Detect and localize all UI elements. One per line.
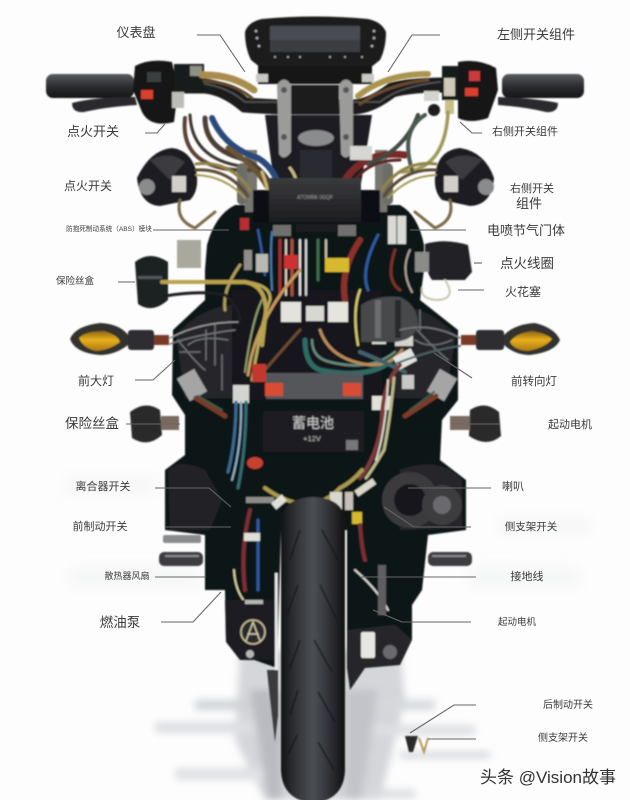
label: right switch assembly lower: 右侧开关 — [510, 181, 554, 195]
label: front brake switch: 前制动开关 — [72, 519, 128, 533]
left fuse pod — [135, 256, 266, 345]
label: starter motor lower: 起动电机 — [498, 616, 536, 628]
label haze — [65, 480, 590, 584]
label: dashboard: 仪表盘 — [116, 25, 156, 40]
label: headlight — [78, 360, 175, 388]
label: radiator fan: 散热器风扇 — [104, 570, 150, 581]
frame mass — [165, 205, 466, 668]
right turn signal — [395, 323, 560, 364]
right side pod — [450, 405, 501, 442]
label: fuse box lower — [65, 415, 180, 431]
lower fork — [225, 573, 412, 742]
label: headlight: 前大灯 — [78, 373, 114, 388]
ground shadow — [155, 650, 490, 800]
label: side stand switch lower: 侧支架开关 — [538, 731, 588, 744]
label: left switch assembly — [388, 27, 575, 72]
label: front turn signal — [434, 353, 557, 388]
label: side stand switch upper: 侧支架开关 — [505, 520, 558, 533]
lower wiring — [234, 510, 388, 615]
watermark: 头条 @Vision故事 — [480, 768, 616, 787]
label: ignition switch lower: 点火开关 — [64, 179, 112, 193]
label: ABS module: 防抱死制动系统（ABS）模块 — [66, 224, 152, 233]
label: horn — [408, 479, 524, 493]
label: fuse box upper: 保险丝盒 — [56, 275, 94, 287]
battery — [263, 373, 364, 452]
label: clutch switch — [76, 479, 231, 507]
battery: 蓄电池 — [292, 415, 334, 431]
label: ignition switch upper — [67, 124, 165, 139]
left switch housing — [133, 61, 204, 124]
label: left switch assembly: 左侧开关组件 — [497, 27, 575, 42]
right grip — [502, 74, 584, 98]
handlebar clamps — [277, 80, 353, 158]
central wiring — [177, 216, 452, 390]
label: throttle body: 电喷节气门体 — [487, 223, 565, 238]
label: fuel pump — [100, 592, 221, 630]
label: spark plug: 火花塞 — [505, 284, 541, 299]
front tyre — [281, 497, 345, 800]
label: rear brake switch: 后制动开关 — [543, 698, 593, 711]
ECU module — [240, 178, 380, 236]
battery: +12V — [303, 434, 321, 443]
label: starter motor lower — [373, 610, 536, 628]
steering stem — [265, 115, 372, 190]
label: rear brake switch — [410, 698, 593, 733]
right lever — [498, 97, 558, 112]
label: right switch assembly lower — [510, 181, 554, 211]
top wiring looms — [185, 74, 448, 210]
right mirror pod — [382, 148, 494, 228]
side connectors and looms — [177, 365, 457, 510]
label: front turn signal: 前转向灯 — [511, 374, 557, 388]
label: fuse box upper — [56, 275, 135, 287]
left mirror pod — [137, 148, 250, 228]
fork stems — [245, 150, 387, 212]
label: dashboard — [116, 25, 245, 72]
label: ignition switch upper: 点火开关 — [67, 124, 119, 139]
right motor — [361, 297, 418, 342]
label: clutch switch: 离合器开关 — [76, 479, 130, 493]
left side pod — [130, 405, 179, 442]
footpegs — [159, 535, 472, 566]
label: right switch assembly lower: 组件 — [516, 196, 542, 211]
left lever — [72, 97, 137, 112]
ECU module: ATOMRK 0GQF — [297, 195, 333, 201]
label: spark plug — [458, 284, 541, 299]
side stand switch part — [405, 736, 428, 752]
label: ignition coil: 点火线圈 — [500, 256, 554, 271]
label: horn: 喇叭 — [502, 479, 524, 493]
dashboard — [245, 16, 386, 84]
label: right switch assembly upper — [460, 122, 558, 138]
handlebar — [176, 85, 445, 107]
label: radiator fan — [104, 570, 205, 581]
label: ground wire: 接地线 — [510, 569, 544, 583]
label: starter motor upper — [452, 417, 592, 431]
label: fuel pump: 燃油泵 — [100, 614, 140, 630]
label: ignition coil — [474, 256, 554, 271]
left turn signal — [70, 322, 238, 355]
ignition coil — [415, 241, 472, 300]
label: right switch assembly upper: 右侧开关组件 — [492, 124, 558, 138]
label: starter motor upper: 起动电机 — [548, 417, 592, 431]
label: fuse box lower: 保险丝盒 — [65, 415, 119, 431]
left grip — [46, 74, 134, 98]
label: side stand switch upper — [384, 507, 558, 533]
right switch housing — [424, 61, 498, 121]
